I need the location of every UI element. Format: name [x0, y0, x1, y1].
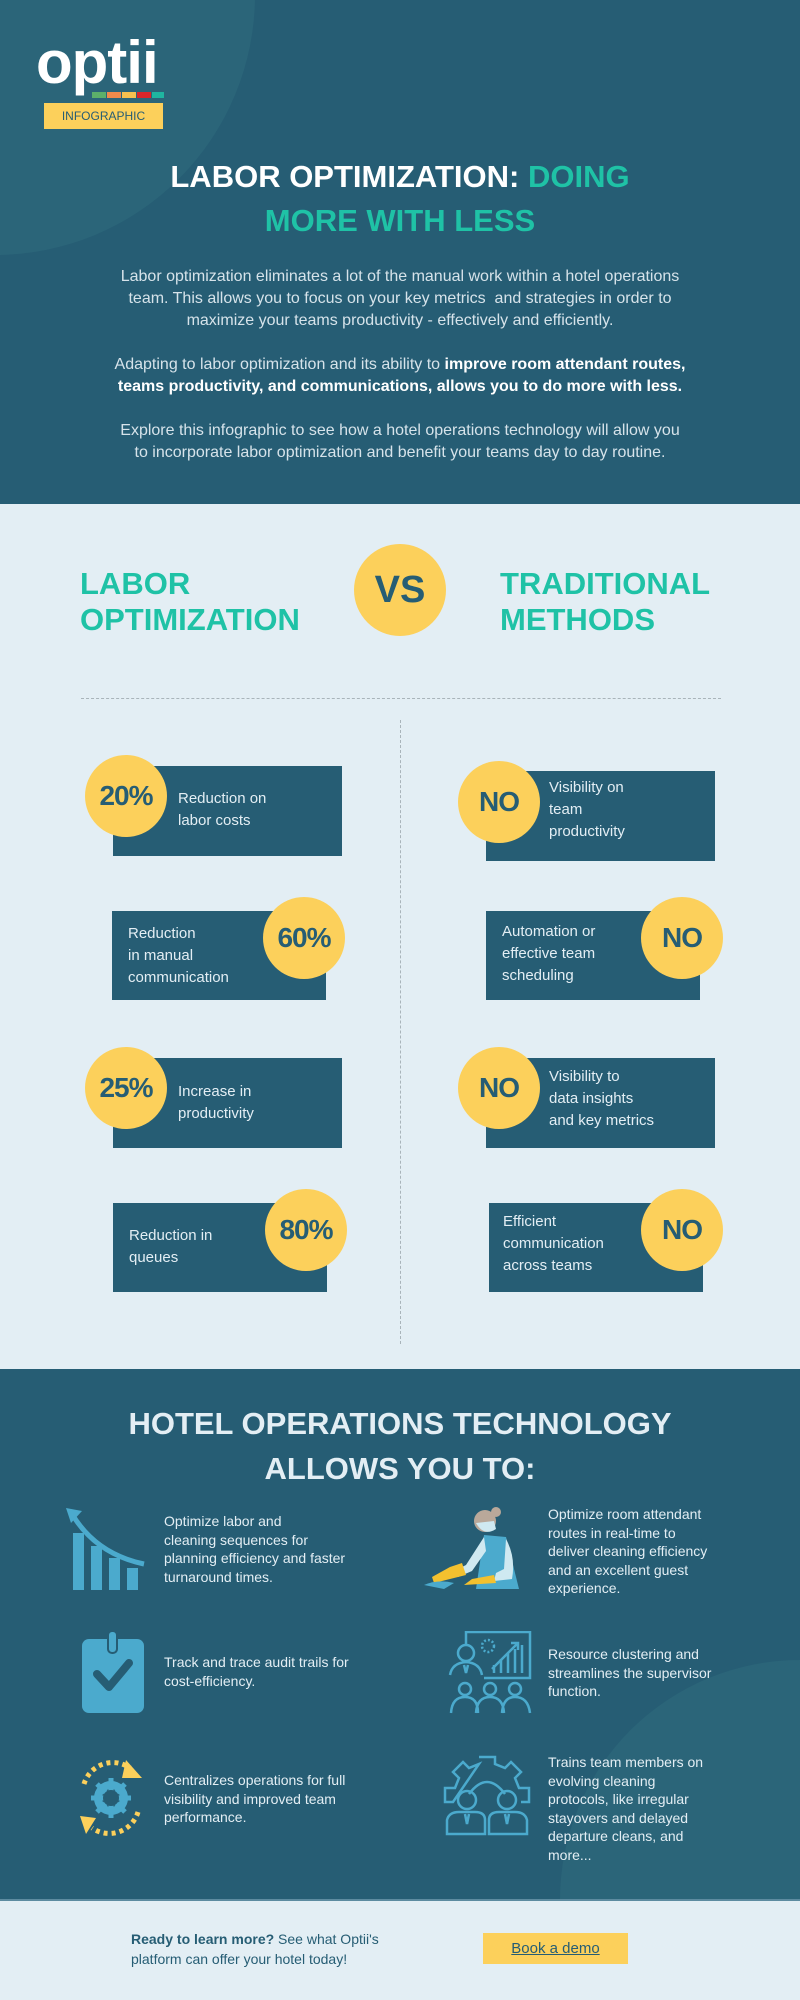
- card: 25%: Increase in: [178, 1083, 251, 1100]
- heading: traditional methods: TRADITIONAL: [500, 566, 710, 601]
- text: resource clustering: function.: [548, 1683, 601, 1699]
- section: comparison: [0, 504, 800, 1369]
- text: resource clustering: [548, 1646, 712, 1699]
- icon: presentation team: [448, 1631, 532, 1714]
- text: trains team: protocols, like irregular: [548, 1791, 689, 1807]
- card: no communication: across teams: [503, 1257, 592, 1274]
- card: no data insights: [458, 1047, 715, 1148]
- text: optimize labor: turnaround times.: [164, 1568, 273, 1584]
- card: 20%: labor costs: [178, 812, 251, 829]
- text: audit trails: [164, 1654, 349, 1689]
- text: optimize routes: [548, 1506, 708, 1596]
- intro paragraph 1: Labor optimization eliminates a lot of the manual work within a hotel operations: [121, 268, 679, 285]
- text: optimize labor: cleaning sequences for: [164, 1532, 308, 1548]
- text: optimize routes: Optimize room attendant: [548, 1506, 701, 1522]
- card: 25%: [85, 1047, 342, 1148]
- heading: technology: HOTEL OPERATIONS TECHNOLOGY: [128, 1406, 672, 1441]
- card: no automation: NO: [662, 922, 702, 953]
- text: trains team: more...: [548, 1846, 592, 1862]
- logo: optii: [36, 29, 158, 96]
- intro paragraph 3: [120, 422, 680, 461]
- cta text: platform can offer your hotel today!: [131, 1951, 347, 1967]
- heading: labor optimization: LABOR: [80, 566, 190, 601]
- text: centralizes operations: performance.: [164, 1809, 246, 1825]
- title: MORE WITH LESS: [265, 203, 535, 238]
- section: call to action: [0, 1899, 800, 2000]
- card: 60%: 60%: [277, 922, 331, 953]
- text: trains team: evolving cleaning: [548, 1772, 655, 1788]
- section: technology: [0, 1369, 800, 1899]
- text: optimize labor: [164, 1513, 345, 1584]
- card: 20%: [85, 755, 342, 856]
- card: 80%: queues: [129, 1249, 178, 1266]
- card: 80%: [113, 1189, 347, 1292]
- text: centralizes operations: [164, 1772, 345, 1825]
- card: 60%: Reduction: [128, 925, 196, 942]
- text: trains team: stayovers and delayed: [548, 1810, 688, 1826]
- card: no data insights: Visibility to: [549, 1068, 620, 1085]
- card: 60%: in manual: [128, 947, 193, 964]
- text: optimize routes: deliver cleaning efficiency: [548, 1543, 707, 1559]
- button: book a demo: [483, 1933, 628, 1964]
- text: centralizes operations: Centralizes operations for full: [164, 1772, 345, 1788]
- heading: technology: ALLOWS YOU TO:: [265, 1451, 535, 1486]
- badge: infographic: [44, 103, 163, 129]
- card: no visibility team: productivity: [549, 823, 625, 840]
- card: no communication: communication: [503, 1235, 604, 1252]
- text: centralizes operations: visibility and improved team: [164, 1790, 336, 1806]
- card: no automation: [486, 897, 723, 1000]
- card: 60%: [112, 897, 345, 1000]
- card: 25%: 25%: [99, 1072, 153, 1103]
- text: trains team: [548, 1754, 703, 1862]
- icon: cleaning attendant: [424, 1507, 519, 1589]
- card: no visibility team: [458, 761, 715, 861]
- heading: labor optimization: OPTIMIZATION: [80, 602, 300, 637]
- heading: labor optimization: [80, 566, 300, 637]
- section: header: [0, 0, 800, 504]
- intro paragraph 3: Explore this infographic to see how a hotel operations technology will allow you: [120, 422, 680, 439]
- intro paragraph 1: [121, 268, 679, 329]
- card: no visibility team: NO: [479, 786, 519, 817]
- icon: declining bar chart: [66, 1508, 144, 1590]
- card: no automation: effective team: [502, 945, 595, 962]
- text: optimize routes: experience.: [548, 1580, 620, 1596]
- intro paragraph 2: Adapting to labor optimization and its ability to improve room attendant routes,: [115, 356, 685, 373]
- text: optimize routes: and an excellent guest: [548, 1562, 688, 1578]
- card: no communication: [489, 1189, 723, 1292]
- button: book a demo: Book a demo: [511, 1940, 600, 1957]
- vs circle: VS: [375, 569, 425, 611]
- icon: clipboard check: [82, 1632, 144, 1713]
- text: optimize labor: planning efficiency and faster: [164, 1550, 345, 1566]
- card: no automation: scheduling: [502, 967, 574, 984]
- text: optimize labor: Optimize labor and: [164, 1513, 282, 1529]
- text: trains team: departure cleans, and: [548, 1828, 683, 1844]
- text: audit trails: Track and trace audit trails for: [164, 1654, 349, 1670]
- card: no data insights: and key metrics: [549, 1112, 654, 1129]
- card: 20%: 20%: [99, 780, 153, 811]
- text: resource clustering: Resource clustering and: [548, 1646, 699, 1662]
- cta text: Ready to learn more? See what Optii's: [131, 1931, 379, 1947]
- icon: gear cycle: [80, 1760, 142, 1836]
- intro paragraph 2: teams productivity, and communications, allows you to do more with less.: [118, 378, 682, 395]
- card: no data insights: NO: [479, 1072, 519, 1103]
- heading: traditional methods: [500, 566, 710, 637]
- card: no automation: Automation or: [502, 923, 595, 940]
- title: [170, 159, 630, 238]
- card: 80%: Reduction in: [129, 1227, 212, 1244]
- card: no visibility team: team: [549, 801, 582, 818]
- intro paragraph 1: maximize your teams productivity - effectively and efficiently.: [187, 312, 613, 329]
- icon: gear with people: [444, 1756, 530, 1836]
- title: LABOR OPTIMIZATION: DOING: [170, 159, 630, 194]
- card: 25%: productivity: [178, 1105, 254, 1122]
- card: no visibility team: Visibility on: [549, 779, 624, 796]
- heading: technology: [128, 1406, 672, 1486]
- badge: infographic: INFOGRAPHIC: [62, 109, 145, 123]
- intro paragraph 1: team. This allows you to focus on your key metrics and strategies in order to: [128, 290, 672, 307]
- card: 80%: 80%: [279, 1214, 333, 1245]
- text: resource clustering: streamlines the supervisor: [548, 1664, 711, 1680]
- intro paragraph 3: to incorporate labor optimization and benefit your teams day to day routine.: [134, 444, 665, 461]
- card: no communication: NO: [662, 1214, 702, 1245]
- text: audit trails: cost-efficiency.: [164, 1672, 255, 1688]
- card: 20%: Reduction on: [178, 790, 266, 807]
- cta text: [131, 1931, 379, 1967]
- heading: traditional methods: METHODS: [500, 602, 655, 637]
- text: trains team: Trains team members on: [548, 1754, 703, 1770]
- text: optimize routes: routes in real-time to: [548, 1524, 676, 1540]
- card: no communication: Efficient: [503, 1213, 556, 1230]
- card: no data insights: data insights: [549, 1090, 633, 1107]
- vs circle: [354, 544, 446, 636]
- intro paragraph 2: [114, 356, 685, 395]
- card: 60%: communication: [128, 969, 229, 986]
